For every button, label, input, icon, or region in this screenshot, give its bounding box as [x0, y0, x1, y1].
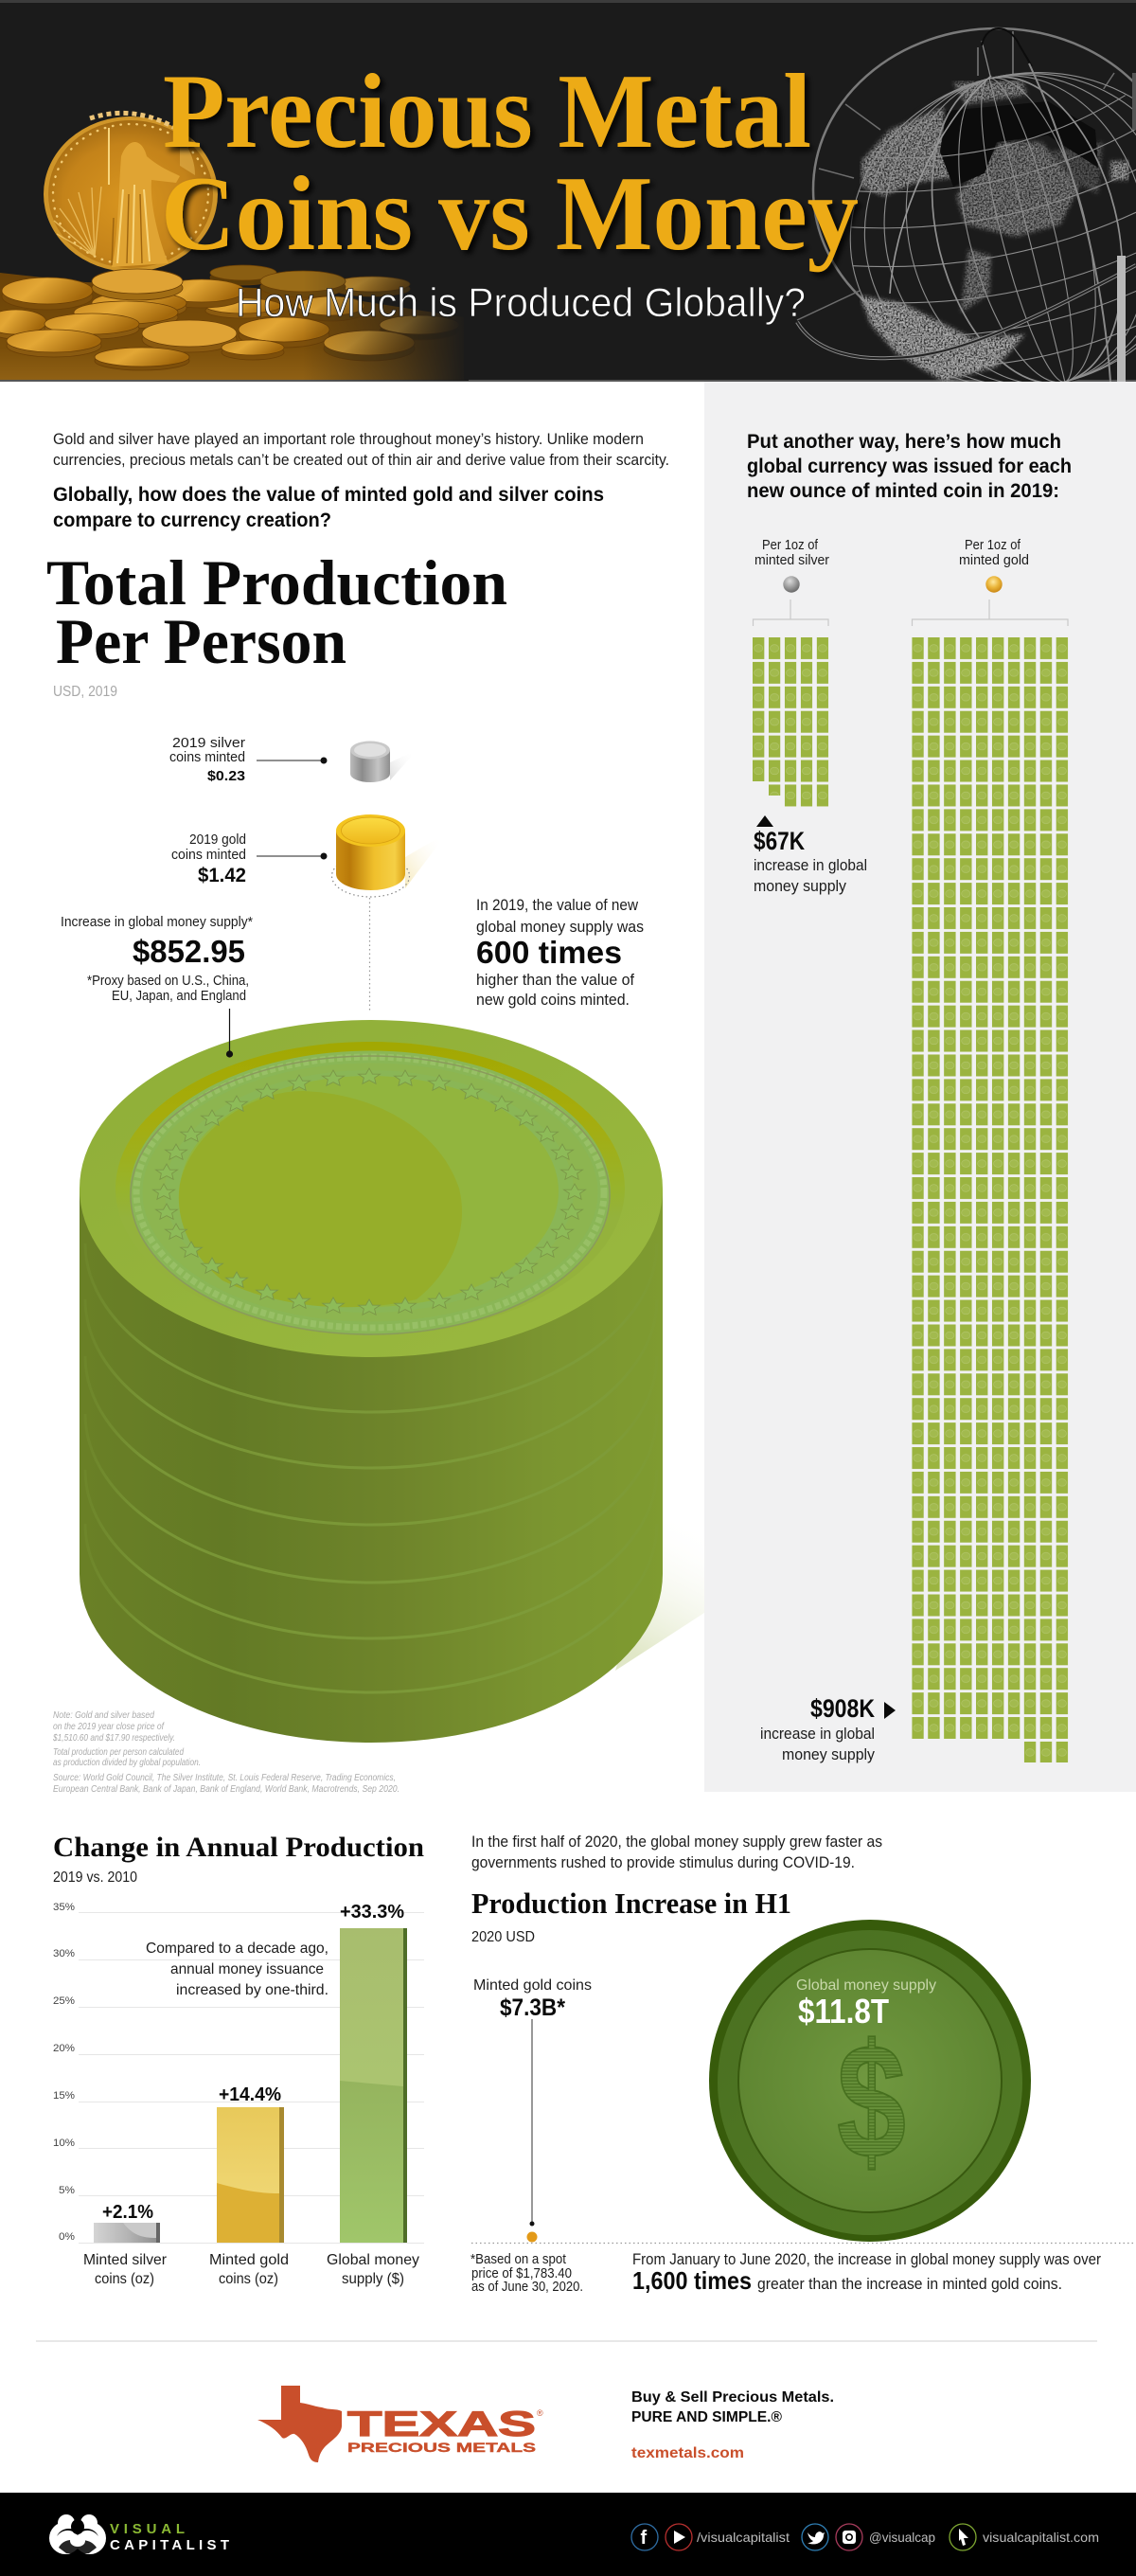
notes and sources: as production divided by global population. [53, 1757, 201, 1768]
bills: silver [753, 637, 828, 807]
callout: global money supply increase: *Proxy based on U.S., China, [87, 974, 249, 989]
callout: 600 times: In 2019, the value of new [476, 897, 638, 914]
inner coin face [165, 1070, 574, 1313]
notes and sources [52, 1709, 399, 1795]
bar: minted gold coins: Minted gold [209, 2252, 289, 2268]
callout: 600 times [476, 897, 644, 1009]
callout: 1,600 times: greater than the increase in minted gold coins. [757, 2276, 1062, 2293]
stars [153, 1068, 585, 1315]
heading: production increase in H1: Production Increase in H1 [471, 1887, 791, 1920]
column: per ounce of gold: $908K [810, 1694, 875, 1723]
icon: silver coin stack [350, 741, 413, 782]
handle: visualcapitalist: /visualcapitalist [697, 2530, 790, 2545]
subheading: units: USD, 2019 [53, 684, 117, 700]
bar: minted gold coins: coins (oz) [219, 2271, 278, 2287]
panel heading: currency issued per ounce: new ounce of minted coin in 2019: [747, 480, 1059, 502]
logo: Texas Precious Metals: ® [537, 2408, 543, 2418]
minted gold coins value: Minted gold coins [473, 1977, 592, 1994]
column: per ounce of silver: $67K [754, 827, 805, 855]
callout: global money supply increase: EU, Japan, and England [112, 989, 246, 1004]
notes and sources: Total production per person calculated [53, 1746, 185, 1758]
notes and sources: European Central Bank, Bank of Japan, Bank of England, World Bank, Macrotrends, Sep 2020. [53, 1783, 399, 1795]
notes and sources: Note: Gold and silver based [53, 1709, 155, 1721]
sponsor tagline: PURE AND SIMPLE.® [631, 2409, 782, 2425]
column: per ounce of gold: money supply [782, 1745, 875, 1763]
social links [631, 2524, 1099, 2550]
milled ring [130, 1051, 611, 1334]
callout: silver coins: 2019 silver [172, 736, 245, 751]
bar: global money supply: supply ($) [342, 2271, 404, 2287]
logo: Texas Precious Metals [257, 2386, 543, 2462]
pointer to money coin stack [226, 1009, 233, 1058]
heading: change in annual production: Change in Annual Production [53, 1832, 424, 1863]
intro question: compare to currency creation? [53, 510, 331, 531]
callout: 600 times: global money supply was [476, 919, 644, 936]
subtitle: How Much is Produced Globally? [236, 280, 806, 326]
icon: website cursor [950, 2524, 976, 2550]
illustration: gold coin [44, 113, 218, 272]
y axis labels: 25% [53, 1995, 75, 2007]
minted gold coins value [473, 1977, 592, 2243]
callout: silver coins: $0.23 [207, 768, 245, 784]
bills: gold [912, 637, 1068, 1762]
callout: silver coins: coins minted [169, 750, 245, 765]
logo: Visual Capitalist: CAPITALIST [110, 2537, 229, 2553]
icon: Twitter [802, 2524, 828, 2550]
intro text: Gold and silver have played an important role throughout money’s history. Unlike modern [53, 431, 644, 448]
column: per ounce of silver: Per 1oz of [762, 538, 819, 553]
heading: total production per person: Total Production [46, 546, 507, 618]
coin top rim [80, 1020, 663, 1357]
header banner [0, 0, 1136, 382]
bar chart [53, 1902, 424, 2287]
notes and sources: on the 2019 year close price of [53, 1721, 165, 1732]
callout: 1,600 times: 1,600 times [632, 2266, 752, 2295]
column: per ounce of gold: Per 1oz of [965, 538, 1021, 553]
coin stack side [80, 1189, 663, 1743]
icon: Texas state [257, 2386, 342, 2462]
baseline dotted line [471, 2243, 1136, 2245]
callout: 1,600 times: From January to June 2020, the increase in global money supply was over [632, 2251, 1101, 2268]
y axis labels: 20% [53, 2043, 75, 2054]
callout: 600 times: new gold coins minted. [476, 992, 630, 1009]
illustration: pile of gold coins [0, 263, 469, 381]
sponsor tagline: texmetals.com [631, 2445, 744, 2461]
panel: per-ounce currency issuance background [704, 382, 1136, 1792]
illustration: globe [795, 27, 1136, 382]
bar: global money supply: +33.3% [340, 1902, 404, 1923]
sponsor tagline: Buy & Sell Precious Metals. [631, 2389, 834, 2406]
panel heading: currency issued per ounce: global currency was issued for each [747, 456, 1072, 477]
chart annotation: increased by one-third. [176, 1982, 328, 1998]
callout: gold coins [171, 832, 328, 886]
bar: minted silver coins [83, 2202, 168, 2287]
callout: 600 times: higher than the value of [476, 972, 634, 989]
icon: Instagram [836, 2524, 862, 2550]
illustration: global money supply coin [709, 1920, 1031, 2242]
callout: gold coins: 2019 gold [189, 832, 246, 848]
icon: gold coin stack [331, 814, 441, 897]
handle: website: visualcapitalist.com [983, 2530, 1099, 2545]
intro question [53, 484, 604, 531]
chart annotation: Compared to a decade ago, [146, 1941, 328, 1957]
callout: 600 times: 600 times [476, 935, 622, 970]
bar: minted silver coins: coins (oz) [95, 2271, 154, 2287]
footnote: spot price: price of $1,783.40 [471, 2266, 572, 2281]
bar: minted silver coins: +2.1% [102, 2202, 153, 2223]
callout: gold coins: $1.42 [198, 865, 246, 886]
heading: total production per person: Per Person [56, 605, 346, 677]
panel heading: currency issued per ounce [747, 431, 1072, 502]
handle: visualcap: @visualcap [869, 2530, 935, 2545]
footnote: spot price: *Based on a spot [470, 2252, 566, 2267]
y axis labels: 0% [59, 2231, 75, 2243]
notes and sources: Source: World Gold Council, The Silver Institute, St. Louis Federal Reserve, Trading Economics, [53, 1772, 396, 1783]
bar: global money supply: Global money [327, 2252, 419, 2268]
divider [36, 2340, 1097, 2342]
column: per ounce of silver: money supply [754, 877, 846, 895]
y axis labels: 10% [53, 2138, 75, 2149]
bar: minted gold coins: +14.4% [219, 2084, 281, 2105]
footnote: spot price: as of June 30, 2020. [471, 2280, 583, 2295]
y axis labels [53, 1902, 75, 2243]
y axis labels: 5% [59, 2185, 75, 2196]
H1 intro text: governments rushed to provide stimulus during COVID-19. [471, 1854, 855, 1871]
icon: YouTube [666, 2524, 692, 2550]
dotted connector from gold coins to money stack [369, 898, 371, 1012]
footer [0, 2493, 1136, 2576]
bar: minted gold coins [209, 2084, 289, 2287]
footnote: spot price [470, 2252, 583, 2295]
y axis labels: 15% [53, 2090, 75, 2102]
icon: logo mark [49, 2514, 106, 2554]
column: per ounce of silver: increase in global [754, 856, 867, 874]
logo: Texas Precious Metals: PRECIOUS METALS [347, 2440, 536, 2455]
column: per ounce of silver [753, 538, 867, 895]
logo: Visual Capitalist [49, 2514, 229, 2554]
illustration: global money supply coin: $11.8T [798, 1992, 889, 2030]
callout: global money supply increase [61, 915, 253, 1004]
title: Precious Metal [163, 53, 811, 170]
intro text [53, 431, 669, 469]
logo: Texas Precious Metals: TEXAS [347, 2405, 536, 2443]
minted gold coins value: $7.3B* [500, 1995, 565, 2021]
callout: silver coins [169, 736, 328, 784]
column: per ounce of gold: increase in global [760, 1725, 875, 1743]
callout: global money supply increase: Increase in global money supply* [61, 915, 253, 930]
column: per ounce of silver: minted silver [754, 553, 829, 568]
column: per ounce of gold: minted gold [959, 553, 1029, 568]
chart annotation [146, 1941, 328, 1998]
panel heading: currency issued per ounce: Put another way, here’s how much [747, 431, 1061, 453]
intro question: Globally, how does the value of minted gold and silver coins [53, 484, 604, 506]
subheading: comparison years: 2019 vs. 2010 [53, 1869, 137, 1886]
H1 intro text [471, 1834, 882, 1871]
H1 intro text: In the first half of 2020, the global money supply grew faster as [471, 1834, 882, 1851]
coin label: Global money supply [796, 1977, 936, 1994]
chart annotation: annual money issuance [170, 1961, 324, 1977]
subheading: H1 units: 2020 USD [471, 1929, 535, 1945]
title [161, 53, 859, 273]
callout: gold coins: coins minted [171, 848, 246, 863]
sponsor tagline [631, 2389, 834, 2461]
logo: Visual Capitalist: VISUAL [110, 2521, 185, 2537]
illustration: money coin stack [80, 1020, 704, 1743]
y axis labels: 35% [53, 1902, 75, 1913]
bar: global money supply [327, 1902, 419, 2287]
icon: dollar sign: $ [837, 2011, 906, 2192]
heading: total production per person [46, 546, 507, 677]
bar: minted silver coins: Minted silver [83, 2252, 168, 2268]
column: per ounce of gold [760, 538, 1068, 1763]
intro text: currencies, precious metals can’t be created out of thin air and derive value from their scarcity. [53, 452, 669, 469]
callout: global money supply increase: $852.95 [133, 934, 245, 969]
y axis labels: 30% [53, 1948, 75, 1959]
icon: tiny gold coin [526, 2231, 538, 2243]
icon: Facebook [631, 2524, 658, 2550]
title: Coins vs Money [161, 155, 859, 273]
icon: Facebook: f [640, 2528, 648, 2549]
notes and sources: $1,510.60 and $17.90 respectively. [52, 1732, 175, 1744]
callout: 1,600 times [632, 2251, 1101, 2295]
